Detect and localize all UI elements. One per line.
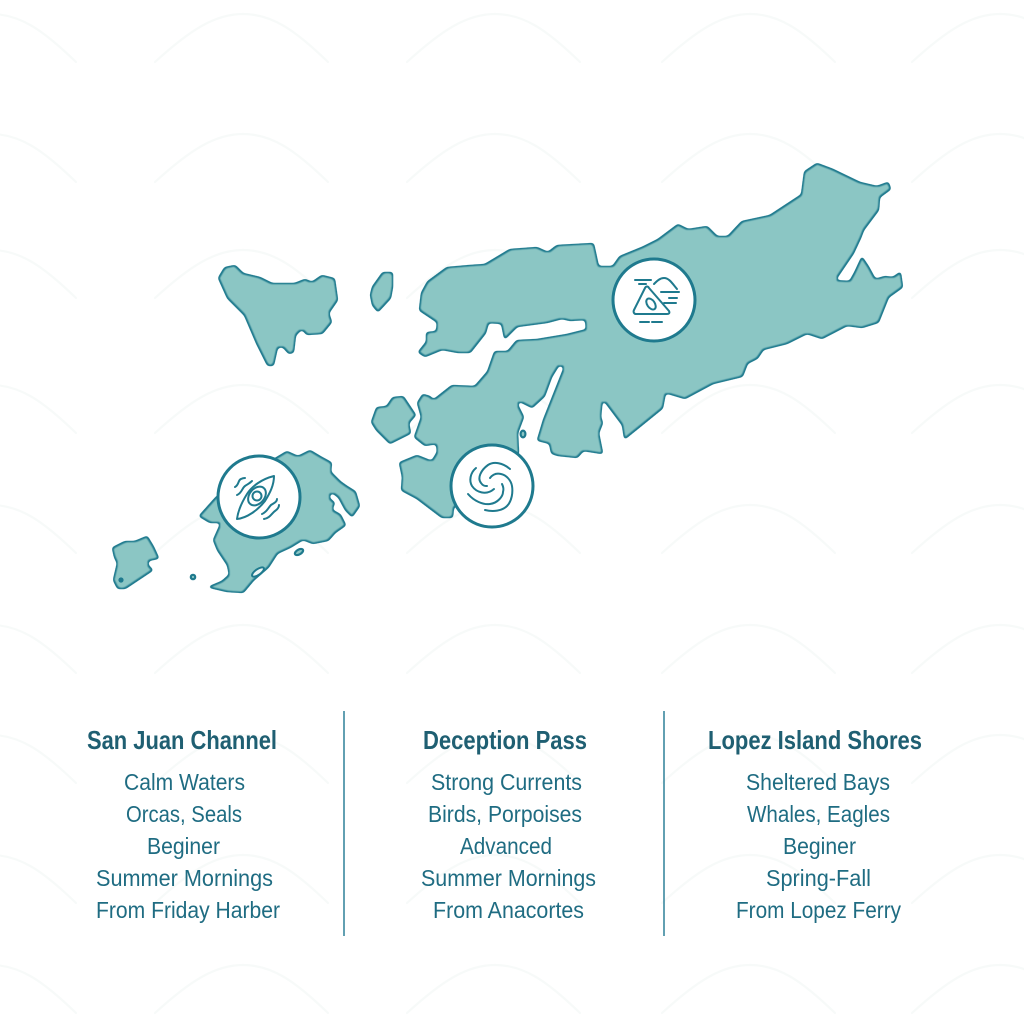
islets — [118, 431, 525, 583]
panel: Lopez Island Shores — [708, 725, 922, 923]
heading: San Juan Channel: San Juan Channel — [87, 725, 277, 755]
panel: Deception Pass — [421, 725, 596, 923]
details: San Juan Channel: Calm Waters — [124, 769, 245, 795]
details: Lopez Island Shores — [736, 769, 901, 923]
islet: dot — [191, 575, 195, 579]
details: Deception Pass: Advanced — [460, 833, 552, 859]
icon: kayak marker — [218, 456, 300, 538]
divider lines — [344, 711, 664, 936]
panel: San Juan Channel — [87, 725, 280, 923]
island map — [113, 164, 902, 592]
details: Deception Pass: Birds, Porpoises — [428, 801, 582, 827]
icon: mountain shores marker — [613, 259, 695, 341]
details: Deception Pass: From Anacortes — [433, 897, 584, 923]
details: Deception Pass — [421, 769, 596, 923]
details: Lopez Island Shores: From Lopez Ferry — [736, 897, 901, 923]
details: Lopez Island Shores: Beginer — [783, 833, 856, 859]
details: Deception Pass: Strong Currents — [431, 769, 582, 795]
island: west of main island — [372, 397, 415, 443]
islet: bay islet — [521, 431, 525, 437]
details: San Juan Channel: Summer Mornings — [96, 865, 273, 891]
details: San Juan Channel — [96, 769, 280, 923]
details: San Juan Channel: From Friday Harber — [96, 897, 280, 923]
island: main island — [400, 164, 902, 517]
details: Lopez Island Shores: Whales, Eagles — [747, 801, 890, 827]
island: southwest small island — [113, 537, 158, 588]
icon: whirlpool marker — [451, 445, 533, 527]
island: northwest triangle island — [219, 266, 337, 365]
islet: southwest dot — [118, 577, 124, 583]
island: San Juan island — [200, 451, 359, 592]
details: Lopez Island Shores: Spring-Fall — [766, 865, 871, 891]
details: San Juan Channel: Beginer — [147, 833, 220, 859]
islet: white shoal — [251, 566, 265, 578]
heading: Lopez Island Shores: Lopez Island Shores — [708, 725, 922, 755]
details: Deception Pass: Summer Mornings — [421, 865, 596, 891]
details: Lopez Island Shores: Sheltered Bays — [746, 769, 890, 795]
island: small oval island — [371, 273, 392, 311]
islet: channel islet — [294, 548, 304, 556]
heading: Deception Pass: Deception Pass — [423, 725, 587, 755]
details: San Juan Channel: Orcas, Seals — [126, 801, 242, 827]
